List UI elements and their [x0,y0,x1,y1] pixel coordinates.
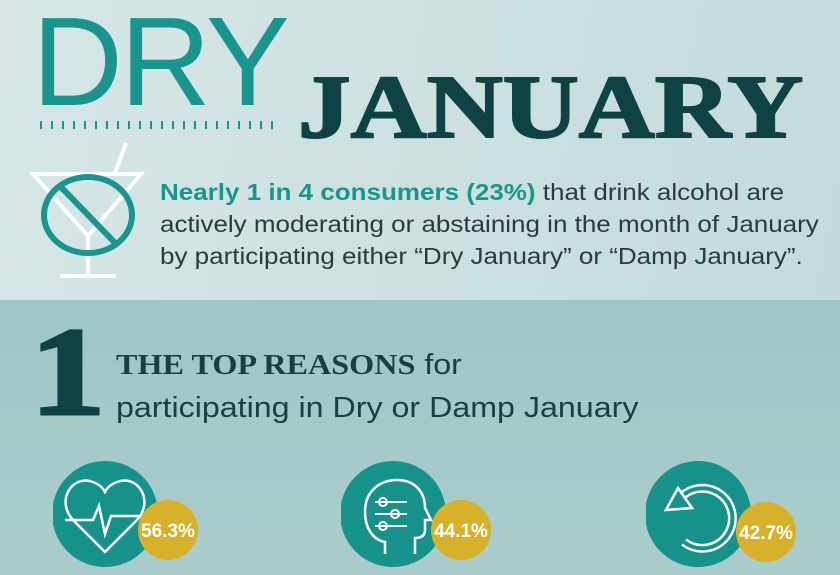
icon: renew 42.7%: 42.7% [739,523,793,544]
title: JANUARY: JANUARY [298,58,803,157]
section heading [116,349,638,424]
section heading: participating in Dry or Damp January [116,392,638,424]
bottom panel background [0,300,840,564]
icon: renew 42.7% [646,461,796,567]
icon: heart 56.3%: 56.3% [141,521,195,542]
icon: head 44.1%: 44.1% [434,521,488,542]
top panel background [0,0,840,300]
intro text: actively moderating or abstaining in the month of January [160,211,819,237]
icon: heart 56.3% [53,461,198,567]
big number 1: 1 [30,303,106,442]
section heading: THE TOP REASONS for [116,349,462,381]
intro text: Nearly 1 in 4 consumers (23%) that drink alcohol are [160,179,784,205]
intro text [160,179,819,269]
dotted divider [40,121,280,129]
intro text: by participating either “Dry January” or “Damp January”. [160,243,803,269]
icon: no-alcohol glass [28,142,146,278]
icon: head 44.1% [341,461,491,567]
